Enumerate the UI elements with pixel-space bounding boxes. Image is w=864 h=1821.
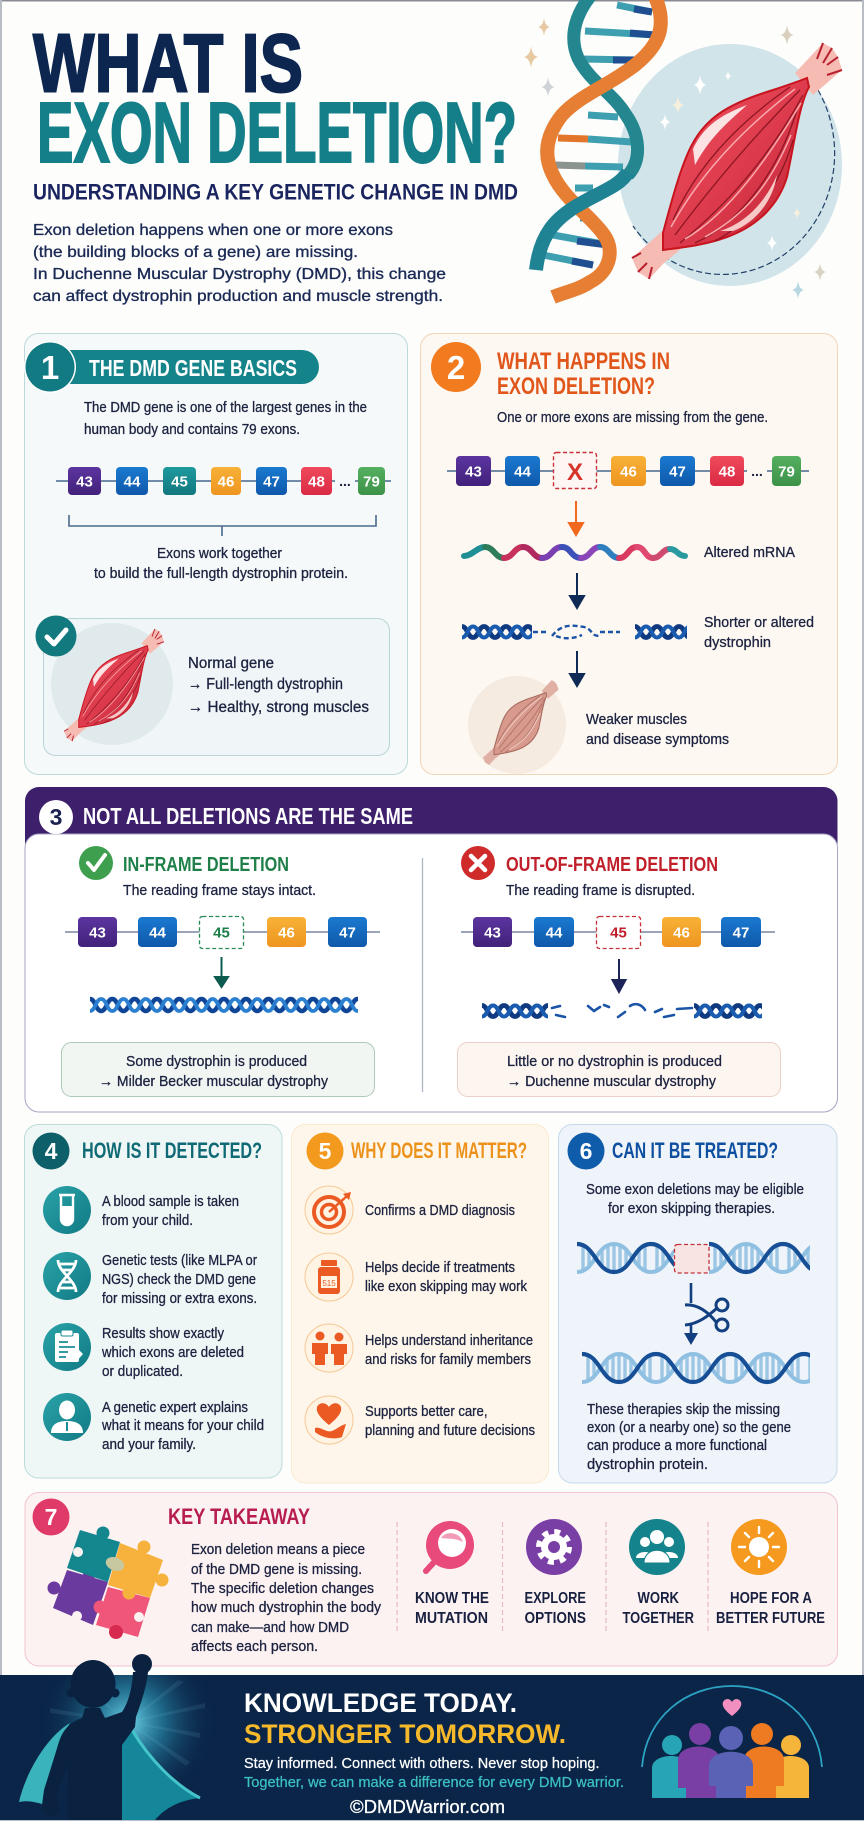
muscle on circle [51, 623, 173, 745]
know the mutation label: KNOW THE [415, 1590, 489, 1607]
heading: WHAT HAPPENS IN [497, 348, 670, 375]
dystrophin label: dystrophin [704, 635, 771, 651]
out-of-frame description: The reading frame is disrupted. [506, 883, 695, 899]
reason 3 text [365, 1333, 533, 1368]
purple piece [48, 1569, 108, 1625]
heading: NOT ALL DELETIONS ARE THE SAME [83, 803, 413, 829]
takeaway text: affects each person. [191, 1639, 318, 1655]
step 4 text: what it means for your child [101, 1418, 264, 1434]
reason 3 text: and risks for family members [365, 1352, 531, 1368]
title: what is exon deletion [33, 16, 517, 181]
check badge [36, 616, 76, 656]
title: what is exon deletion: WHAT IS [33, 16, 303, 110]
exon strip with deletion: 79 [778, 464, 795, 480]
takeaway text: of the DMD gene is missing. [191, 1562, 362, 1578]
exon strip with deletion: 43 [465, 464, 482, 480]
caption [94, 546, 348, 582]
step 2 text [102, 1253, 257, 1307]
out-of-frame exon strip: 45 [610, 924, 627, 942]
explanation text [587, 1402, 791, 1473]
icon: family members [305, 1324, 353, 1372]
in-frame column [62, 846, 380, 1096]
reason 4 text: Supports better care, [365, 1404, 488, 1420]
intro text block: Exon deletion happens when one or more exons [33, 222, 393, 239]
takeaway text: how much dystrophin the body [191, 1600, 382, 1616]
explore options label: EXPLORE [524, 1590, 586, 1607]
family group illustration [642, 1686, 822, 1798]
heading: WHY DOES IT MATTER? [351, 1138, 527, 1163]
out-of-frame exon strip: 46 [673, 924, 690, 942]
dna orange strand [547, 0, 661, 297]
number badge: 5 [319, 1138, 332, 1164]
heading: HOW IS IT DETECTED? [82, 1138, 262, 1163]
icon: genetic expert [43, 1393, 91, 1441]
scissors and arrow [684, 1283, 728, 1345]
raised fist [132, 1654, 152, 1674]
indigo person [709, 1726, 753, 1798]
shortened dystrophin [462, 623, 687, 641]
yellow person [772, 1735, 809, 1798]
number badge: 6 [580, 1138, 592, 1164]
slogan: STRONGER TOMORROW. [244, 1719, 566, 1749]
normal gene box [36, 616, 390, 756]
sparkles [524, 18, 826, 299]
step 1 text: A blood sample is taken [102, 1194, 239, 1210]
panel 6: can it be treated [558, 1124, 837, 1483]
icon: people work together [629, 1519, 685, 1575]
exon strip: 47 [263, 474, 280, 490]
step 3 text: or duplicated. [102, 1364, 183, 1380]
number badge [431, 342, 481, 392]
weaker muscle label [586, 712, 729, 748]
icon: sun hope [731, 1519, 787, 1575]
takeaway text: The specific deletion changes [191, 1581, 374, 1597]
arc [642, 1686, 822, 1767]
out-of-frame arrow [612, 959, 626, 992]
normal gene text: → Full-length dystrophin [188, 676, 343, 693]
out-of-frame heading: OUT-OF-FRAME DELETION [506, 854, 718, 876]
exon strip: ... [339, 473, 351, 489]
orange person [744, 1723, 784, 1798]
exon strip with deletion: 48 [719, 464, 735, 480]
exon strip: 46 [218, 474, 234, 490]
yellow piece [108, 1540, 168, 1600]
eligibility text [586, 1182, 804, 1217]
know the mutation label: MUTATION [415, 1610, 488, 1627]
number badge: 7 [45, 1504, 57, 1530]
in-frame exon strip: 44 [149, 924, 166, 942]
exon strip with deletion [447, 452, 809, 488]
slogan [244, 1688, 566, 1749]
step 1 text: from your child. [102, 1213, 193, 1229]
x icon [461, 846, 495, 880]
step 2 text: NGS) check the DMD gene [102, 1272, 256, 1288]
weaker muscle label: Weaker muscles [586, 712, 687, 728]
icon: test tube [43, 1186, 91, 1234]
icon: medicine bottle: 515 [322, 1279, 336, 1288]
panel 2: what happens in exon deletion [420, 334, 838, 774]
heading [497, 348, 670, 400]
in-frame exon strip [65, 916, 380, 948]
step 2 text: for missing or extra exons. [102, 1291, 257, 1307]
takeaway text [191, 1542, 382, 1655]
step 4 text: and your family. [102, 1437, 196, 1453]
weaker muscle [468, 676, 566, 774]
description: One or more exons are missing from the gene. [497, 410, 768, 426]
full dystrophin chain [90, 995, 358, 1015]
child hero silhouette [19, 1654, 200, 1820]
glow behind child [50, 1675, 205, 1776]
in-frame exon strip: 46 [278, 924, 295, 942]
background circle [618, 44, 842, 286]
explanation text: can produce a more functional [587, 1438, 767, 1454]
dna with missing exon [577, 1241, 810, 1275]
exon strip: 43 [76, 474, 93, 490]
exon strip with deletion: X [567, 459, 583, 486]
exon strip with deletion: 44 [514, 464, 531, 480]
repaired dna [582, 1351, 810, 1385]
out-of-frame exon strip: 44 [546, 924, 563, 942]
step 3 text: Results show exactly [102, 1326, 225, 1342]
hope label: HOPE FOR A [730, 1590, 812, 1607]
out-of-frame exon strip: 47 [733, 924, 749, 942]
icon: puzzle [48, 1526, 168, 1639]
intro text block: (the building blocks of a gene) are missing. [33, 244, 358, 261]
icon: medicine bottle [305, 1253, 353, 1301]
intro text block: In Duchenne Muscular Dystrophy (DMD), this change [33, 266, 446, 283]
dystrophin label: Shorter or altered [704, 615, 814, 631]
out-of-frame outcome box: Little or no dystrophin is produced [507, 1054, 722, 1070]
supporting lines [244, 1755, 624, 1791]
dna helix [536, 0, 661, 297]
check icon [79, 846, 113, 880]
reason 4 text: planning and future decisions [365, 1423, 535, 1439]
icon: clipboard [43, 1323, 91, 1371]
teal person [652, 1735, 690, 1798]
hero illustration: dna helix, muscle and sparkles [524, 0, 842, 299]
normal gene text [188, 655, 369, 716]
website: ©DMDWarrior.com [350, 1797, 505, 1817]
reason 2 text [365, 1260, 528, 1295]
weaker muscle label: and disease symptoms [586, 732, 729, 748]
description [84, 400, 367, 438]
number badge: 4 [45, 1138, 58, 1164]
supporting lines: Stay informed. Connect with others. Never stop hoping. [244, 1755, 600, 1772]
out-of-frame column [458, 846, 780, 1096]
panel 7: key takeaway [25, 1492, 838, 1666]
bracket [69, 515, 376, 536]
hope label [716, 1590, 825, 1627]
heading: CAN IT BE TREATED? [612, 1138, 778, 1163]
altered mrna wave [464, 547, 685, 558]
teal piece [67, 1526, 120, 1582]
footer banner [0, 1654, 864, 1821]
in-frame exon strip: 45 [213, 924, 230, 942]
slogan: KNOWLEDGE TODAY. [244, 1688, 517, 1718]
title: what is exon deletion: EXON DELETION? [37, 86, 517, 181]
cape [19, 1723, 70, 1805]
number badge: 3 [50, 804, 62, 830]
caption: Exons work together [157, 546, 282, 562]
step 2 text: Genetic tests (like MLPA or [102, 1253, 257, 1269]
description: human body and contains 79 exons. [84, 422, 300, 438]
icon: target [305, 1186, 353, 1234]
eligibility text: for exon skipping therapies. [608, 1201, 775, 1217]
explore options label: OPTIONS [524, 1610, 586, 1627]
banner heading: 1 [41, 349, 59, 386]
exon strip: 45 [171, 474, 188, 490]
exon strip: 79 [363, 474, 380, 490]
red piece [94, 1587, 150, 1639]
arrow to dystrophin [570, 573, 584, 608]
muscle [632, 43, 842, 279]
purple person [678, 1723, 720, 1798]
in-frame exon strip: 43 [89, 924, 106, 942]
in-frame description: The reading frame stays intact. [123, 883, 316, 899]
dystrophin label [704, 615, 814, 651]
dna teal strand back [574, 0, 638, 175]
out-of-frame outcome box [458, 1042, 780, 1096]
out-of-frame outcome box: → Duchenne muscular dystrophy [507, 1074, 717, 1090]
in-frame arrow [215, 957, 228, 987]
banner heading: THE DMD GENE BASICS [89, 355, 297, 381]
in-frame outcome box: → Milder Becker muscular dystrophy [99, 1074, 329, 1090]
dna rungs [543, 5, 655, 265]
icon: gear explore options [526, 1519, 582, 1575]
eligibility text: Some exon deletions may be eligible [586, 1182, 804, 1198]
work together label: TOGETHER [622, 1610, 694, 1627]
heading: EXON DELETION? [497, 373, 655, 400]
number badge [32, 1498, 70, 1536]
broken dystrophin chain [482, 1002, 762, 1020]
exon strip [56, 467, 391, 495]
exon strip: 48 [308, 474, 325, 490]
body [42, 1672, 148, 1820]
dna teal strand front [536, 172, 628, 270]
hope label: BETTER FUTURE [716, 1610, 825, 1627]
banner heading [24, 341, 319, 393]
arrow to mrna [569, 501, 583, 535]
panel 1: the dmd gene basics [24, 334, 408, 774]
reason 4 text [365, 1404, 535, 1439]
icon: dna [43, 1252, 91, 1300]
work together label: WORK [638, 1590, 679, 1607]
exon strip with deletion: 46 [620, 464, 637, 480]
takeaway text: Exon deletion means a piece [191, 1542, 365, 1558]
takeaway text: can make—and how DMD [191, 1620, 349, 1636]
know the mutation label [415, 1590, 489, 1627]
number badge [39, 800, 73, 834]
intro text block [33, 222, 446, 305]
normal gene text: → Healthy, strong muscles [188, 699, 369, 716]
heart [723, 1699, 741, 1716]
number badge [306, 1132, 344, 1170]
panel 4: how is it detected [24, 1124, 282, 1478]
explanation text: These therapies skip the missing [587, 1402, 780, 1418]
number badge [32, 1132, 70, 1170]
caption: to build the full-length dystrophin protein. [94, 566, 348, 582]
in-frame outcome box: Some dystrophin is produced [126, 1054, 307, 1070]
icon: heart in hand [305, 1396, 353, 1444]
number badge [568, 1132, 604, 1170]
step 4 text [101, 1400, 264, 1453]
out-of-frame exon strip: 43 [484, 924, 501, 942]
subtitle: UNDERSTANDING A KEY GENETIC CHANGE IN DMD [33, 180, 518, 204]
head and ears [70, 1660, 116, 1708]
altered mrna label: Altered mRNA [704, 545, 795, 561]
explore options label [524, 1590, 586, 1627]
arrow to weaker muscle [570, 651, 584, 686]
reason 2 text: Helps decide if treatments [365, 1260, 515, 1276]
exon strip with deletion: 47 [669, 464, 686, 480]
step 3 text [101, 1326, 244, 1380]
description: The DMD gene is one of the largest genes in the [84, 400, 367, 416]
reason 3 text: Helps understand inheritance [365, 1333, 533, 1349]
number badge: 2 [447, 349, 465, 386]
explanation text: exon (or a nearby one) so the gene [587, 1420, 791, 1436]
step 4 text: A genetic expert explains [102, 1400, 248, 1416]
exon strip with deletion: ... [751, 463, 763, 479]
panel 5: why does it matter [292, 1124, 548, 1483]
in-frame outcome box [62, 1042, 374, 1096]
icon: magnifier know the mutation [426, 1521, 474, 1571]
step 3 text: which exons are deleted [101, 1345, 244, 1361]
normal gene text: Normal gene [188, 655, 274, 672]
supporting lines: Together, we can make a difference for every DMD warrior. [244, 1774, 624, 1791]
exon strip: 44 [124, 474, 141, 490]
out-of-frame exon strip [461, 916, 775, 948]
panel 3: not all deletions are the same [25, 787, 838, 1112]
work together label [622, 1590, 694, 1627]
reason 2 text: like exon skipping may work [365, 1279, 528, 1295]
intro text block: can affect dystrophin production and muscle strength. [33, 288, 443, 305]
step 1 text [102, 1194, 239, 1229]
explanation text: dystrophin protein. [587, 1457, 708, 1473]
in-frame heading: IN-FRAME DELETION [123, 854, 289, 876]
heading: KEY TAKEAWAY [168, 1504, 310, 1529]
reason 1 text: Confirms a DMD diagnosis [365, 1203, 515, 1219]
in-frame exon strip: 47 [339, 924, 356, 942]
